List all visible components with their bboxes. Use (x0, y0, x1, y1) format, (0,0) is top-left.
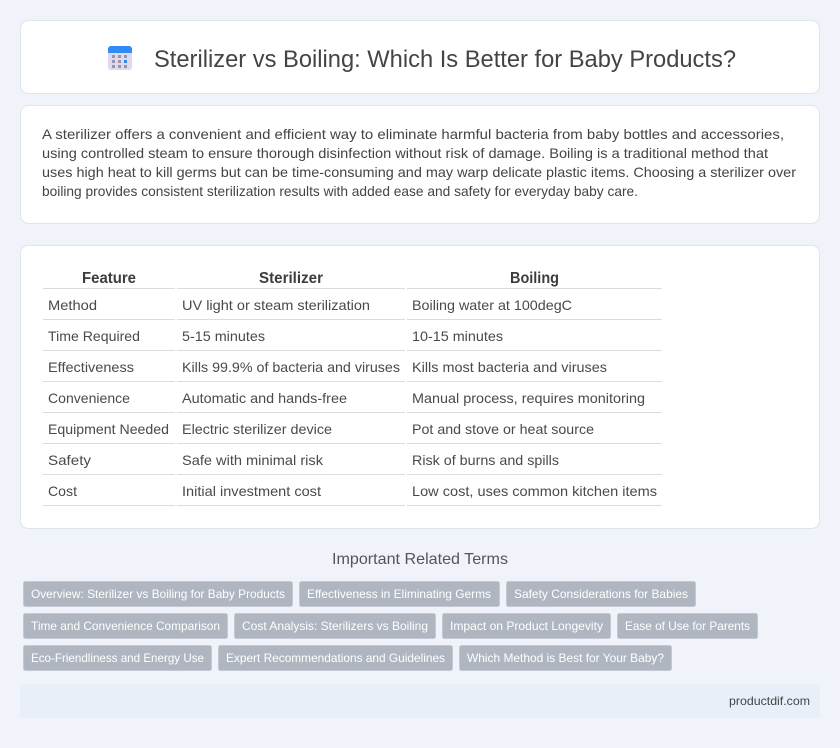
panel: intro paragraph: using controlled steam to ensure thorough disinfection without risk of damage. Boiling is a traditional method that (42, 145, 768, 161)
row: convenience: Automatic and hands-free (182, 390, 347, 406)
panel: intro paragraph: boiling provides consistent sterilization results with added ease and safety for everyday baby care. (42, 183, 638, 199)
tag: Eco-Friendliness and Energy Use (31, 651, 204, 665)
panel: comparison table (20, 246, 820, 528)
table header (82, 270, 559, 287)
row: cost: Cost (48, 483, 77, 499)
tag: Time and Convenience Comparison (31, 619, 220, 633)
icon: calendar (108, 46, 132, 70)
tag (24, 646, 212, 670)
table header: Boiling (510, 270, 559, 287)
tag (218, 646, 452, 670)
tag (618, 614, 758, 638)
row: safety: Risk of burns and spills (412, 452, 559, 468)
tag (234, 614, 436, 638)
tag: Expert Recommendations and Guidelines (226, 651, 445, 665)
row: cost: Low cost, uses common kitchen items (412, 483, 657, 499)
row: convenience: Manual process, requires monitoring (412, 390, 645, 406)
row: equipment needed: Pot and stove or heat source (412, 421, 594, 437)
row: method (48, 297, 572, 313)
row: method: UV light or steam sterilization (182, 297, 370, 313)
row: safety: Safe with minimal risk (182, 452, 324, 468)
footer: productdif.com (729, 694, 810, 708)
row: effectiveness: Effectiveness (48, 359, 134, 375)
row: effectiveness (48, 359, 607, 375)
tag (506, 582, 696, 606)
related term tags (24, 582, 758, 670)
tag: Impact on Product Longevity (450, 619, 603, 633)
row: safety: Safety (48, 452, 91, 468)
footer (20, 684, 820, 718)
tag (442, 614, 610, 638)
panel: intro paragraph: uses high heat to kill germs but can be time-consuming and may warp delicate plastic items. Choosing a sterilizer over (42, 164, 796, 180)
panel: intro paragraph: A sterilizer offers a convenient and efficient way to eliminate harmful bacteria from baby bottles and accessories, (42, 126, 784, 142)
row: method: Method (48, 297, 97, 313)
tag: Which Method is Best for Your Baby? (467, 651, 664, 665)
row: time required: Time Required (48, 328, 140, 344)
row: time required (48, 328, 503, 344)
row: equipment needed (48, 421, 594, 437)
row: convenience (48, 390, 645, 406)
row: equipment needed: Equipment Needed (48, 421, 169, 437)
row: method: Boiling water at 100degC (412, 297, 572, 313)
title: Sterilizer vs Boiling: Which Is Better for Baby Products? (154, 46, 736, 73)
table header: Sterilizer (259, 270, 323, 287)
tag (460, 646, 672, 670)
tag (24, 582, 292, 606)
heading: related terms: Important Related Terms (332, 551, 508, 568)
tag: Cost Analysis: Sterilizers vs Boiling (242, 619, 428, 633)
tag: Effectiveness in Eliminating Germs (307, 587, 491, 601)
panel: intro paragraph (20, 106, 820, 224)
row: effectiveness: Kills 99.9% of bacteria and viruses (182, 359, 400, 375)
row: equipment needed: Electric sterilizer device (182, 421, 332, 437)
row: cost: Initial investment cost (182, 483, 321, 499)
row: safety (48, 452, 559, 468)
table header: Feature (82, 270, 136, 287)
row: convenience: Convenience (48, 390, 130, 406)
tag: Ease of Use for Parents (625, 619, 750, 633)
row: cost (48, 483, 657, 499)
tag (24, 614, 228, 638)
tag (300, 582, 500, 606)
tag: Safety Considerations for Babies (514, 587, 688, 601)
row: time required: 5-15 minutes (182, 328, 265, 344)
row: time required: 10-15 minutes (412, 328, 503, 344)
row: effectiveness: Kills most bacteria and viruses (412, 359, 607, 375)
tag: Overview: Sterilizer vs Boiling for Baby Products (31, 587, 285, 601)
header panel (20, 20, 820, 94)
